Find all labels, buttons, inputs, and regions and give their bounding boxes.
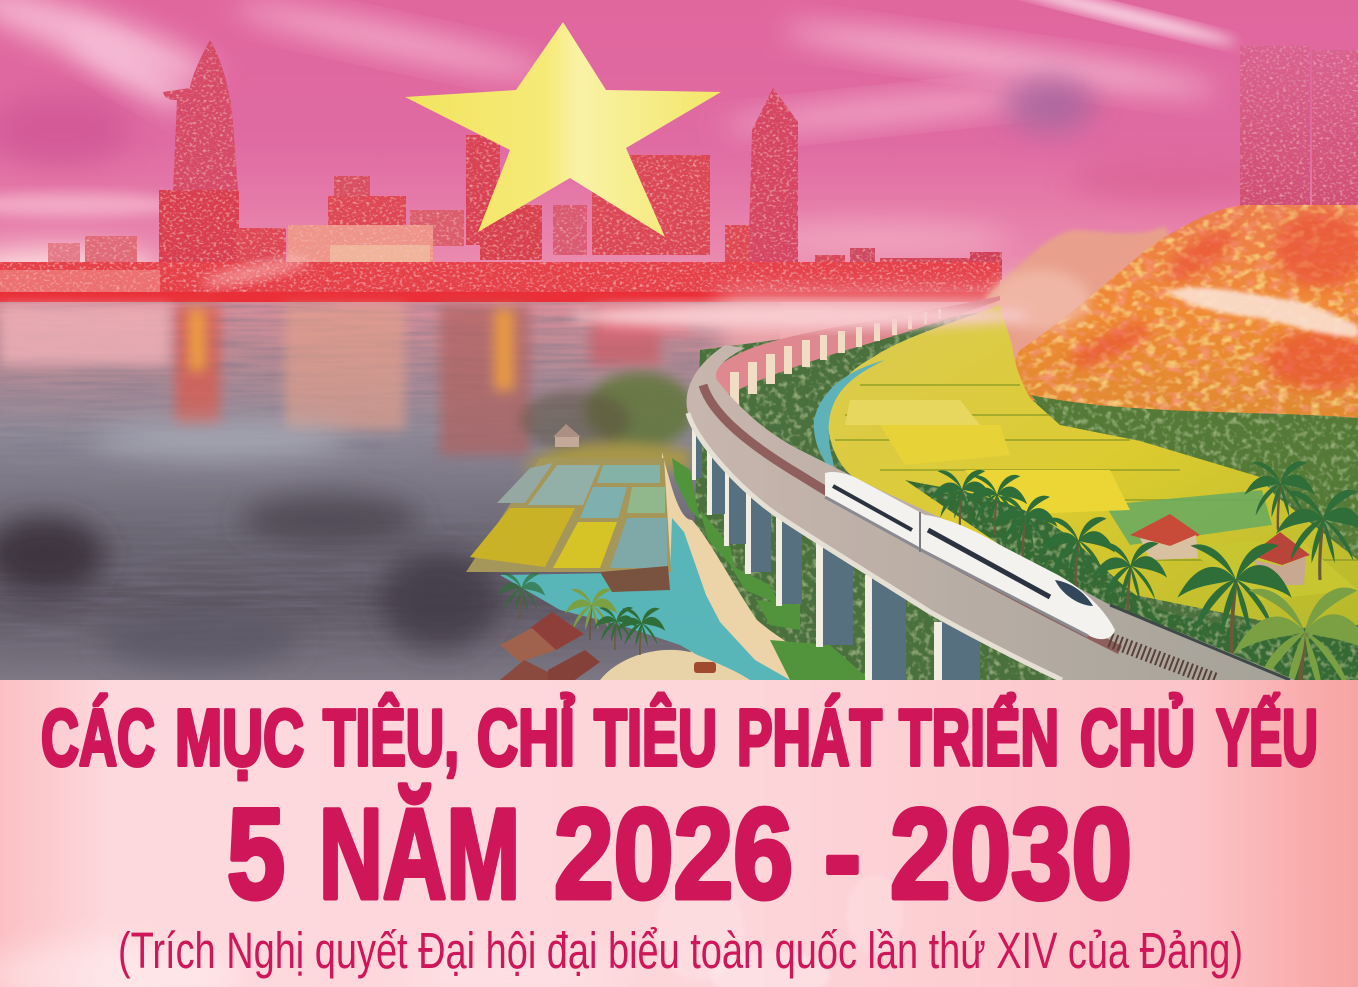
bright mist on the skyline xyxy=(200,253,310,291)
bottom left house xyxy=(500,612,600,680)
city light reflections xyxy=(0,305,690,455)
city skyline xyxy=(0,40,1002,292)
viaduct pillars xyxy=(692,428,980,680)
pink mist over waterline xyxy=(570,304,1030,328)
tower: right xyxy=(748,88,798,270)
dark palm belt beside the viaduct xyxy=(905,480,1358,680)
hillside xyxy=(985,205,1358,560)
dark water patches xyxy=(0,422,500,666)
heading line 1: PHÁT xyxy=(737,693,882,782)
heading line 2 xyxy=(227,783,1132,926)
cart xyxy=(694,662,716,673)
flag star xyxy=(405,22,721,237)
heading line 2: - xyxy=(824,783,861,926)
buildings row xyxy=(48,135,1002,282)
flowering slope xyxy=(1015,205,1358,418)
tower: Bitexco xyxy=(159,40,239,270)
canal xyxy=(814,360,885,484)
river water xyxy=(0,302,780,680)
far viaduct xyxy=(700,296,1000,406)
left palms xyxy=(497,573,665,655)
village hut xyxy=(553,424,581,447)
heading line 1: TRIỂN xyxy=(899,693,1059,782)
trees above paddies xyxy=(520,372,695,470)
heading line 1 xyxy=(41,693,1318,782)
viaduct deck and tracks xyxy=(687,345,1295,680)
sky background xyxy=(0,0,1358,320)
heading line 1: TIÊU xyxy=(594,693,717,782)
heading line 2: 2026 xyxy=(554,783,793,926)
house two xyxy=(1250,532,1310,585)
coconut palms xyxy=(931,461,1358,725)
teal river xyxy=(500,518,790,680)
low colonial buildings xyxy=(288,225,433,280)
wooden boat xyxy=(600,566,670,592)
rice terraces xyxy=(828,305,1358,640)
bullet train xyxy=(825,472,1115,639)
land under the viaduct curve xyxy=(690,310,1358,680)
green shrubs along the beach xyxy=(672,458,870,680)
heading line 1: MỤC xyxy=(175,693,304,782)
bank with cart xyxy=(600,650,750,680)
quay xyxy=(0,292,1000,302)
beach xyxy=(660,452,840,680)
heading line 2: 5 xyxy=(227,783,285,926)
heading line 1: CHỈ xyxy=(477,693,575,782)
palm grove and houses xyxy=(905,461,1358,725)
heading line 1: CHỦ xyxy=(1080,693,1195,782)
heading line 1: TIÊU, xyxy=(323,693,459,782)
pale far slope xyxy=(985,226,1200,395)
sky streaks xyxy=(0,0,1290,292)
riverfront band xyxy=(0,262,1000,292)
green foothill band xyxy=(1030,395,1358,560)
right faded towers xyxy=(1240,46,1358,206)
title panel xyxy=(0,680,1358,987)
house one xyxy=(1130,514,1200,560)
red shading on the slope xyxy=(1064,212,1358,390)
land foreground left xyxy=(466,372,870,680)
mist on the slope xyxy=(1165,287,1358,338)
mist band behind the far viaduct xyxy=(720,296,1020,356)
small rice paddies xyxy=(466,458,671,572)
heading line 2: NĂM xyxy=(319,783,520,926)
heading line 1: CÁC xyxy=(41,693,155,782)
heading line 2: 2030 xyxy=(890,783,1132,926)
